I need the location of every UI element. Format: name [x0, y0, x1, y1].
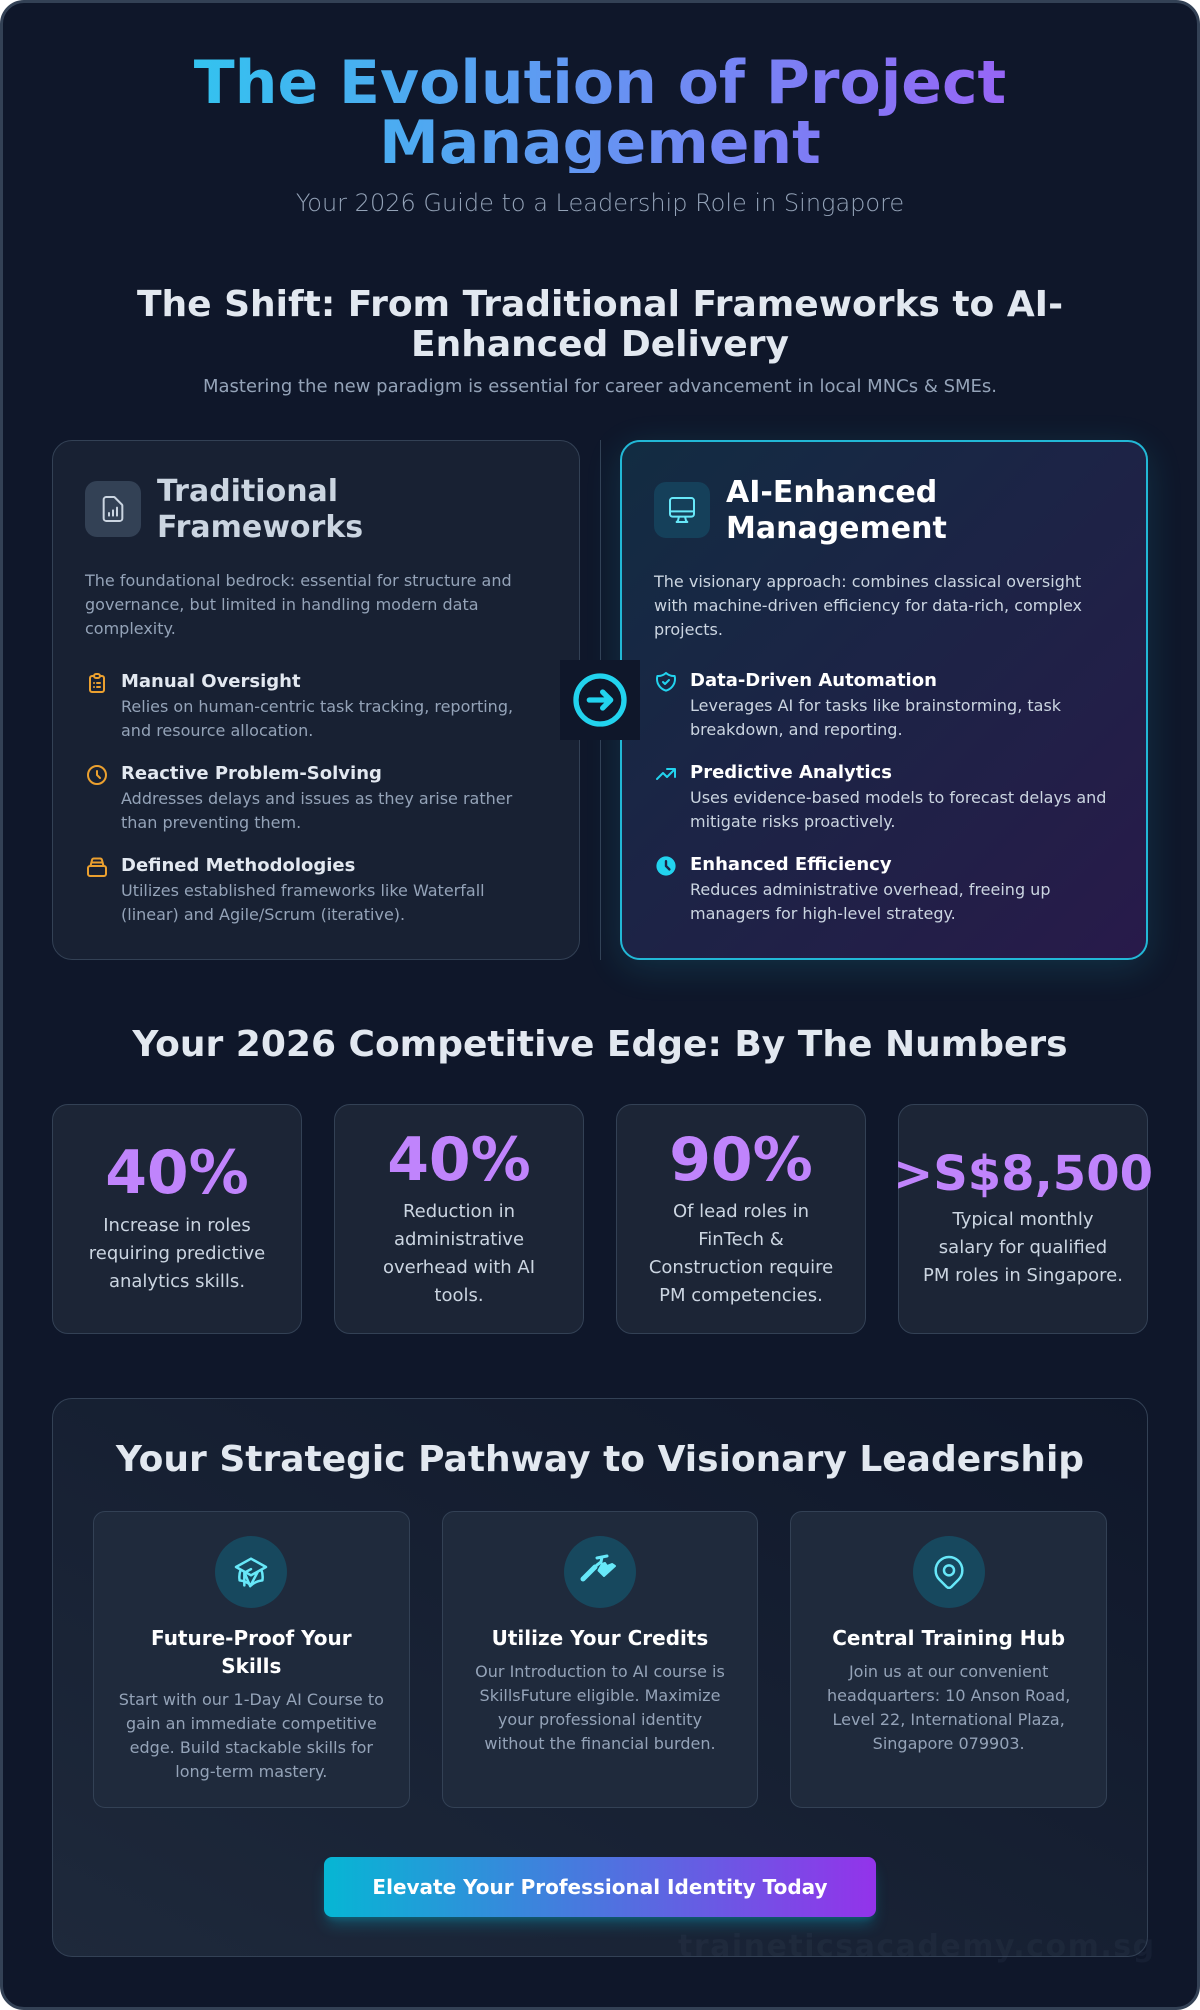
- icon: location marker: [913, 1536, 985, 1608]
- list item: data-driven automation: breakdown, and reporting.: [690, 720, 903, 739]
- step title: Central Training Hub: [832, 1626, 1065, 1650]
- stat description: Construction require: [649, 1257, 833, 1278]
- list item: manual oversight: Relies on human-centric task tracking, reporting,: [121, 697, 513, 716]
- list item: predictive analytics: mitigate risks proactively.: [690, 812, 895, 831]
- list item: predictive analytics: Predictive Analytics: [690, 762, 892, 783]
- step text: your professional identity: [498, 1710, 702, 1729]
- list item: manual oversight: and resource allocation.: [121, 721, 313, 740]
- icon: document report: [85, 481, 141, 537]
- stat description: administrative: [394, 1229, 524, 1250]
- step title: Future-Proof Your: [151, 1626, 352, 1650]
- step text: Start with our 1-Day AI Course to: [119, 1690, 384, 1709]
- stat description: analytics skills.: [109, 1271, 245, 1292]
- stat description: salary for qualified: [939, 1237, 1107, 1258]
- description: traditional: [84, 571, 512, 638]
- panel: traditional frameworks: [52, 440, 580, 960]
- call to action button: [324, 1857, 876, 1917]
- pathway card: training hub: [790, 1511, 1107, 1808]
- step title: [151, 1626, 352, 1678]
- heading: traditional frameworks: Traditional: [157, 474, 338, 509]
- stat card: 40% administrative overhead: [334, 1104, 584, 1334]
- step text: long-term mastery.: [175, 1762, 327, 1781]
- stat description: Increase in roles: [103, 1215, 251, 1236]
- heading: the shift: The Shift: From Traditional Frameworks to AI-: [137, 284, 1063, 325]
- pathway card: credits: [442, 1511, 758, 1808]
- stat value: >S$8,500: [893, 1146, 1153, 1202]
- stat description: Reduction in: [403, 1201, 515, 1222]
- heading: by the numbers: Your 2026 Competitive Edge: By The Numbers: [132, 1024, 1068, 1065]
- heading: AI-enhanced management: [726, 475, 947, 546]
- list item: data-driven automation: [656, 670, 1061, 739]
- stat description: [923, 1209, 1123, 1286]
- step text: Singapore 079903.: [873, 1734, 1025, 1753]
- stat card: 90% lead roles: [616, 1104, 866, 1334]
- step text: edge. Build stackable skills for: [130, 1738, 373, 1757]
- pathway card: future-proof: [93, 1511, 410, 1808]
- list item: defined methodologies: (linear) and Agile/Scrum (iterative).: [121, 905, 405, 924]
- step text: gain an immediate competitive: [126, 1714, 377, 1733]
- stat description: Typical monthly: [952, 1209, 1094, 1230]
- heading: traditional frameworks: Frameworks: [157, 510, 363, 545]
- description: traditional: governance, but limited in handling modern data: [85, 595, 479, 614]
- panel: AI-enhanced management: [620, 440, 1148, 960]
- heading: AI-enhanced management: Management: [726, 511, 947, 546]
- list item: enhanced efficiency: [656, 854, 1050, 923]
- heading: the shift: [137, 284, 1063, 365]
- list item: enhanced efficiency: Reduces administrative overhead, freeing up: [690, 880, 1050, 899]
- stat description: [89, 1215, 265, 1292]
- icon: academic cap: [215, 1536, 287, 1608]
- stat description: [649, 1201, 833, 1306]
- list item: data-driven automation: Leverages AI for tasks like brainstorming, task: [690, 696, 1061, 715]
- list item: enhanced efficiency: Enhanced Efficiency: [690, 854, 892, 875]
- stat description: tools.: [434, 1285, 484, 1306]
- stat description: Of lead roles in: [673, 1201, 809, 1222]
- heading: the shift: Enhanced Delivery: [411, 324, 789, 365]
- icon: desktop computer: [654, 482, 710, 538]
- subtitle: Your 2026 Guide to a Leadership Role in Singapore: [296, 189, 904, 217]
- lead text: Mastering the new paradigm is essential for career advancement in local MNCs & SMEs.: [203, 376, 997, 397]
- list item: reactive problem-solving: than preventing them.: [121, 813, 301, 832]
- list item: enhanced efficiency: managers for high-level strategy.: [690, 904, 956, 923]
- list item: defined methodologies: Utilizes established frameworks like Waterfall: [121, 881, 485, 900]
- list item: predictive analytics: Uses evidence-based models to forecast delays and: [690, 788, 1106, 807]
- description: traditional: The foundational bedrock: essential for structure and: [85, 571, 512, 590]
- title: The Evolution of Project: [194, 48, 1006, 118]
- list item: manual oversight: Manual Oversight: [121, 671, 301, 692]
- stat description: PM competencies.: [659, 1285, 823, 1306]
- step title: Skills: [221, 1654, 281, 1678]
- description: AI: projects.: [654, 620, 723, 639]
- stat description: FinTech &: [698, 1229, 784, 1250]
- step text: headquarters: 10 Anson Road,: [827, 1686, 1070, 1705]
- call to action button: Elevate Your Professional Identity Today: [372, 1875, 828, 1899]
- description: AI: The visionary approach: combines classical oversight: [654, 572, 1081, 591]
- step text: without the financial burden.: [484, 1734, 716, 1753]
- list item: reactive problem-solving: Addresses delays and issues as they arise rather: [121, 789, 512, 808]
- stat description: PM roles in Singapore.: [923, 1265, 1123, 1286]
- icon: transition arrow: [560, 660, 640, 740]
- step title: Utilize Your Credits: [492, 1626, 708, 1650]
- stat description: requiring predictive: [89, 1243, 265, 1264]
- step text: Level 22, International Plaza,: [833, 1710, 1065, 1729]
- description: AI: with machine-driven efficiency for data-rich, complex: [654, 596, 1082, 615]
- stat description: [383, 1201, 535, 1306]
- stat card: salary: [898, 1104, 1148, 1334]
- step text: Our Introduction to AI course is: [475, 1662, 725, 1681]
- list item: manual oversight: [89, 671, 513, 740]
- stat card: 40% predictive analytics: [52, 1104, 302, 1334]
- heading: AI-enhanced management: AI-Enhanced: [726, 475, 937, 510]
- description: traditional: complexity.: [85, 619, 176, 638]
- list item: defined methodologies: [87, 855, 485, 924]
- stat value: 90%: [669, 1125, 813, 1195]
- stat description: overhead with AI: [383, 1257, 535, 1278]
- list item: data-driven automation: Data-Driven Automation: [690, 670, 937, 691]
- title: [52, 53, 1148, 173]
- list item: reactive problem-solving: Reactive Problem-Solving: [121, 763, 382, 784]
- watermark: traineticsacademy.com.sg: [678, 1929, 1156, 1964]
- list item: predictive analytics: [656, 762, 1106, 831]
- title: Management: [379, 108, 821, 178]
- step text: Join us at our convenient: [849, 1662, 1048, 1681]
- stat value: 40%: [387, 1125, 531, 1195]
- step text: [119, 1690, 384, 1781]
- panel: strategic pathway: [52, 1398, 1148, 1957]
- stat value: 40%: [105, 1138, 249, 1208]
- step text: [827, 1662, 1070, 1753]
- description: AI: [654, 572, 1082, 639]
- heading: strategic pathway: Your Strategic Pathway to Visionary Leadership: [116, 1439, 1084, 1480]
- list item: defined methodologies: Defined Methodologies: [121, 855, 355, 876]
- step text: SkillsFuture eligible. Maximize: [480, 1686, 720, 1705]
- list item: reactive problem-solving: [87, 763, 512, 832]
- step text: [475, 1662, 725, 1753]
- icon: tools: [564, 1536, 636, 1608]
- heading: traditional frameworks: [157, 474, 363, 545]
